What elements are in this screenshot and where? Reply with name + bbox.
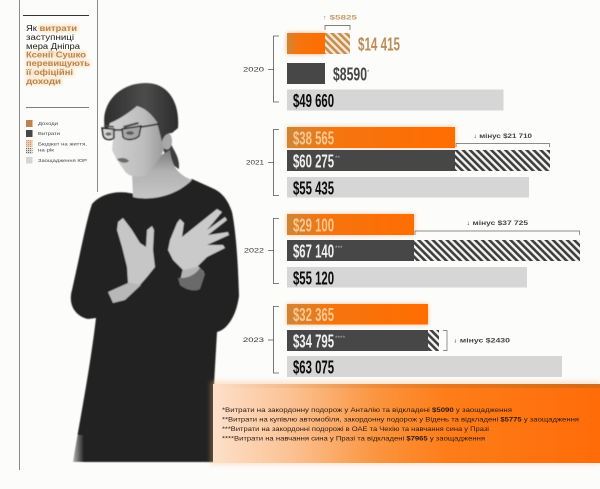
2023 expenses bar: ****: [335, 335, 346, 342]
2020 income bar: $14 415: [358, 34, 400, 54]
2022 savings bar: $55 120: [293, 268, 334, 288]
2021 deficit annotation: [456, 134, 550, 147]
2023 year label: [243, 306, 279, 373]
2020 expenses bar: *: [367, 70, 370, 76]
title text: доходи: [26, 77, 61, 86]
hair: [104, 83, 178, 142]
title text: [25, 24, 90, 86]
face: [108, 104, 168, 177]
2022 income bar: $29 100: [293, 214, 334, 236]
2020 expenses bar: $8590: [333, 64, 367, 84]
2023 year label: 2023: [243, 337, 265, 344]
footnote text: [222, 407, 579, 442]
title text: її офіційні: [25, 68, 73, 77]
2020 income bar: [287, 33, 400, 54]
legend: income: Доходи: [38, 121, 59, 126]
2021 income bar: [287, 127, 455, 148]
2022 expenses bar: [287, 240, 580, 262]
chart: 2021: [246, 127, 550, 198]
ponytail: [163, 140, 179, 169]
2023 deficit annotation: [443, 330, 511, 350]
2022 deficit annotation: ↓ мінус $37 725: [466, 221, 529, 227]
footnote text: ***Витрати на закордонні подорожі в ОАЕ та Чехію та навчання сина у Празі: [222, 426, 489, 433]
2023 savings bar: $63 075: [293, 356, 334, 378]
glasses: [102, 124, 159, 140]
neck: [132, 150, 192, 198]
footnotes panel: [210, 381, 600, 465]
chart: 2023: [243, 304, 562, 378]
2023 savings bar: [287, 356, 562, 378]
2021 year label: [246, 130, 279, 196]
legend: expenses: Витрати: [38, 131, 61, 136]
photo: woman gesturing: [70, 83, 239, 463]
chart: 2020: [243, 16, 504, 111]
2022 year label: [244, 218, 279, 284]
footnote text: *Витрати на закордонну подорож у Анталію та відкладені $5090 у заощадження: [222, 407, 512, 414]
wristwatch: [178, 268, 205, 290]
dress: [71, 179, 239, 462]
2020 savings bar: [287, 90, 504, 111]
legend: living budget: Бюджет на життя,: [38, 142, 87, 146]
2022 expenses bar: ***: [335, 245, 343, 252]
footnote text: **Витрати на купівлю автомобіля, закордонну подорож у Відень та відкладені $5775 у заощадження: [222, 416, 579, 424]
ear: [162, 132, 172, 150]
title text: Ксенії Сушко: [26, 50, 86, 60]
2021 income bar: $38 565: [293, 128, 334, 148]
title text: Як витрати: [26, 24, 77, 33]
2021 savings bar: $55 435: [293, 178, 334, 198]
dress hem fade: [70, 435, 84, 463]
2020 year label: [243, 36, 279, 102]
2023 expenses bar: $34 795: [293, 330, 334, 352]
2021 year label: 2021: [246, 160, 265, 166]
2021 expenses bar: **: [335, 155, 341, 162]
footnote text: ****Витрати на навчання сина у Празі та відкладені $7965 у заощадження: [222, 436, 485, 442]
right wrist: [180, 266, 204, 288]
2022 income bar: [287, 214, 414, 236]
legend: savings: Заощадження ЮР: [38, 158, 87, 163]
left hand: [117, 218, 155, 285]
2020 expenses bar: [287, 63, 370, 84]
2020 surplus annotation: [322, 16, 358, 30]
right hand: [168, 209, 229, 270]
2022 year label: 2022: [244, 248, 265, 254]
legend: living budget: [26, 140, 87, 154]
2023 income bar: [287, 304, 428, 325]
title highlight glow: [26, 25, 90, 85]
2020 savings bar: $49 660: [293, 90, 334, 111]
2020 year label: 2020: [243, 66, 265, 74]
2022 deficit annotation: [415, 221, 580, 235]
2021 expenses bar: $60 275: [293, 150, 334, 172]
2021 expenses bar: [287, 150, 550, 172]
2023 deficit annotation: ↓ мінус $2430: [453, 338, 511, 344]
title text: мера Дніпра: [26, 42, 81, 51]
2023 expenses bar: [287, 330, 439, 352]
chart: 2022: [244, 214, 580, 288]
2020 surplus annotation: ↑ $5825: [322, 16, 358, 22]
eyebrows and eyes: [104, 122, 139, 136]
legend: living budget: на рік: [38, 148, 55, 152]
title block: [23, 16, 90, 86]
2021 deficit annotation: ↓ мінус $21 710: [473, 134, 533, 140]
title text: заступниці: [26, 33, 74, 42]
left forearm: [108, 283, 141, 303]
2023 income bar: $32 365: [293, 304, 334, 325]
2022 savings bar: [287, 267, 527, 288]
2022 expenses bar: $67 140: [293, 240, 334, 262]
title text: перевищують: [26, 59, 90, 68]
mouth: [117, 158, 129, 163]
legend: [26, 108, 89, 164]
2021 savings bar: [287, 177, 529, 198]
